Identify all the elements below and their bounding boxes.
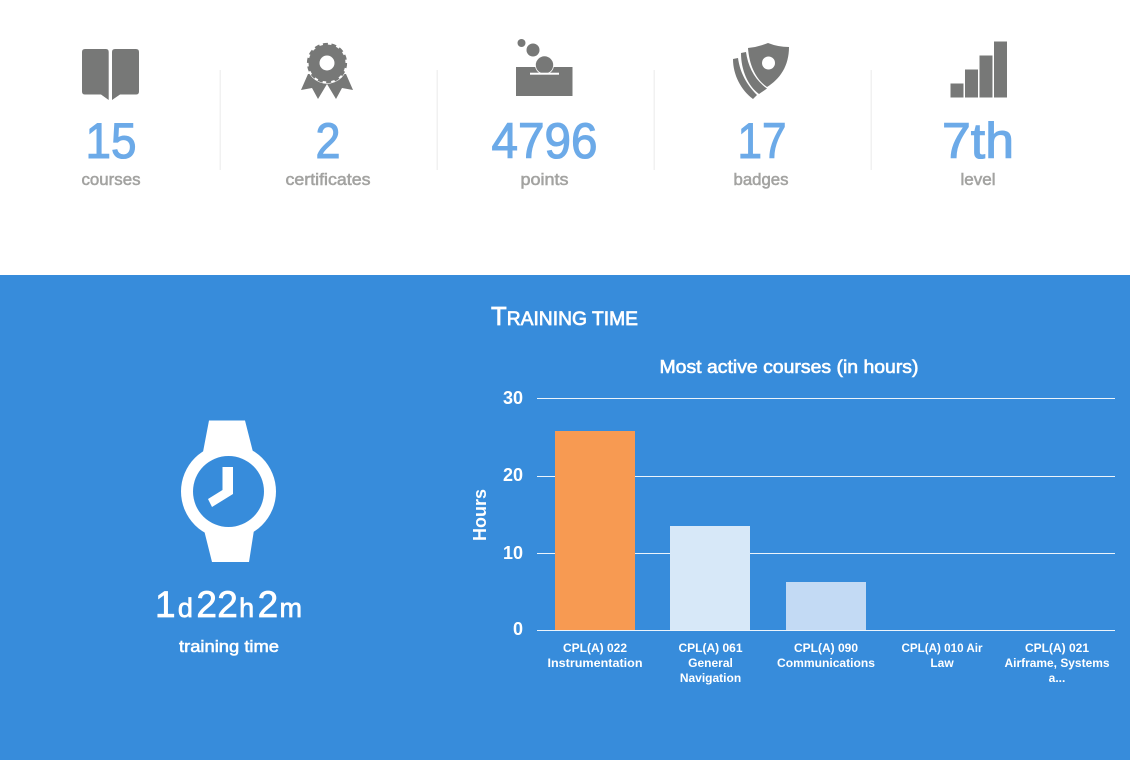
heading: training time: TRAINING TIME (491, 301, 638, 331)
icon: layered shield (733, 43, 789, 99)
panel: training time (0, 275, 1130, 760)
bar chart: most active courses (470, 357, 1115, 685)
category labels: General (688, 656, 733, 670)
category labels: CPL(A) 090 (794, 641, 858, 655)
category labels: Law (930, 656, 954, 670)
icon: open book (82, 49, 139, 100)
icon: ascending bars (950, 42, 1007, 98)
badges label: badges (734, 171, 788, 189)
points number: 4796 (492, 113, 598, 169)
icon: coins dropping into box (516, 39, 572, 96)
y axis ticks (503, 388, 523, 639)
category labels (548, 641, 1110, 685)
category labels: CPL(A) 022 (563, 641, 627, 655)
category labels: a... (1049, 671, 1065, 685)
chart title: Most active courses (in hours) (660, 357, 918, 377)
badges number: 17 (738, 113, 786, 169)
stat: points (492, 39, 598, 189)
bar: instrumentation (555, 431, 635, 630)
icon: award rosette (301, 42, 353, 99)
y axis ticks: 30 (503, 388, 523, 408)
level number: 7th (942, 113, 1014, 169)
category labels: CPL(A) 061 (678, 641, 743, 655)
stat: certificates (286, 42, 370, 189)
y axis ticks: 20 (503, 465, 523, 485)
y axis ticks: 10 (503, 543, 523, 563)
stat: courses (82, 49, 140, 189)
courses number: 15 (86, 113, 136, 169)
points label: points (520, 171, 568, 189)
stat: level (942, 42, 1014, 189)
training time value: 1d22h2m (155, 584, 302, 625)
y axis ticks: 0 (513, 619, 523, 639)
icon: wristwatch (181, 420, 276, 562)
category labels: Communications (777, 656, 875, 670)
bar: communications (786, 582, 866, 630)
category labels: CPL(A) 021 (1025, 641, 1089, 655)
y axis title: Hours (470, 489, 490, 541)
bar: general navigation (670, 526, 750, 630)
certificates number: 2 (316, 113, 340, 169)
category labels: Instrumentation (548, 656, 642, 670)
level label: level (960, 171, 996, 189)
category labels: Navigation (680, 671, 741, 685)
training time label: training time (179, 638, 279, 656)
category labels: Airframe, Systems (1004, 656, 1110, 670)
stat: badges (733, 43, 789, 189)
courses label: courses (82, 171, 140, 189)
certificates label: certificates (286, 171, 370, 189)
category labels: CPL(A) 010 Air (902, 641, 983, 655)
